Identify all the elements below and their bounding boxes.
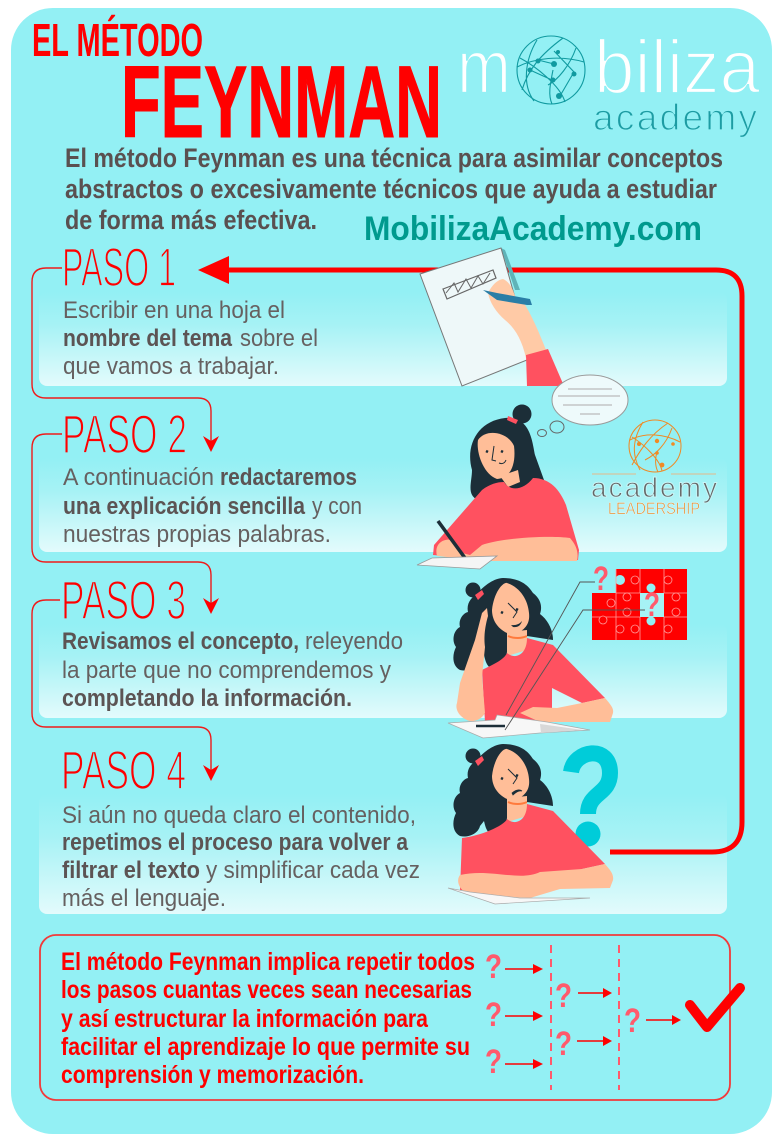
logo: academy leadership: LEADERSHIP bbox=[608, 499, 700, 518]
icon: puzzle: ? bbox=[644, 586, 660, 624]
step 2 text: nuestras propias palabras. bbox=[63, 521, 331, 548]
icon: puzzle: ? bbox=[593, 560, 609, 598]
step 3 text bbox=[62, 628, 403, 712]
step 1 text bbox=[63, 297, 318, 380]
logo: mobiliza academy bbox=[457, 25, 761, 138]
step 4 bbox=[61, 739, 420, 912]
intro text: de forma más efectiva. bbox=[65, 205, 317, 235]
panel: paso 4 background bbox=[39, 794, 727, 914]
logo: mobiliza academy: biliza bbox=[594, 25, 761, 110]
step 3 text: Revisamos el concepto, bbox=[62, 628, 299, 655]
step 2 bbox=[62, 403, 362, 548]
illustration: woman thinking bbox=[448, 578, 613, 738]
intro text bbox=[65, 143, 723, 235]
step 3 text: la parte que no comprendemos y bbox=[62, 657, 391, 684]
filter diagram: ? bbox=[485, 948, 502, 986]
step 2 heading: PASO 2 bbox=[62, 403, 187, 465]
step 1 text: sobre el bbox=[240, 325, 318, 352]
step 4 text: Si aún no queda claro el contenido, bbox=[62, 802, 416, 829]
illustration: woman writing bbox=[417, 404, 579, 569]
step 1 heading: PASO 1 bbox=[62, 236, 176, 298]
step 2 text: redactaremos bbox=[220, 464, 357, 491]
logo: academy leadership: academy bbox=[591, 472, 717, 503]
step 1 text: nombre del tema bbox=[63, 325, 233, 352]
connector: paso 2 to 3 bbox=[32, 434, 219, 614]
icon: large question mark bbox=[571, 753, 610, 846]
step 1 text: que vamos a trabajar. bbox=[63, 353, 279, 380]
step 3 heading: PASO 3 bbox=[61, 569, 186, 631]
step 2 text: y con bbox=[312, 493, 362, 520]
icon: paper and writing hand bbox=[420, 248, 564, 386]
callout: summary bbox=[40, 935, 740, 1100]
step 2 text: A continuación bbox=[63, 464, 214, 491]
step 3 bbox=[61, 569, 403, 712]
loop arrow bbox=[198, 256, 742, 852]
filter diagram: ? bbox=[485, 996, 502, 1034]
panel: paso 1 background bbox=[39, 292, 727, 386]
icon: check mark bbox=[690, 988, 740, 1027]
filter diagram: ? bbox=[555, 1025, 572, 1063]
icon: thought bubble bbox=[538, 375, 628, 436]
panel: paso 3 background bbox=[39, 624, 727, 718]
step 1 text: Escribir en una hoja el bbox=[63, 297, 285, 324]
logo: academy leadership bbox=[591, 420, 717, 518]
connector: paso 1 to 2 bbox=[32, 268, 219, 452]
filter diagram: ? bbox=[485, 1043, 502, 1081]
leader lines bbox=[505, 582, 645, 730]
step 3 text: completando la información. bbox=[62, 685, 352, 712]
step 3 text: releyendo bbox=[305, 628, 403, 655]
filter diagram: ? bbox=[555, 977, 572, 1015]
step 4 heading: PASO 4 bbox=[61, 739, 186, 801]
title: EL MÉTODO bbox=[32, 14, 203, 66]
logo: mobiliza academy: academy bbox=[593, 97, 758, 138]
step 4 text: repetimos el proceso para volver a bbox=[62, 829, 409, 856]
filter diagram: ? bbox=[624, 1002, 641, 1040]
connector: paso 3 to 4 bbox=[32, 600, 219, 781]
step 4 text: más el lenguaje. bbox=[62, 885, 226, 912]
step 4 text: filtrar el texto bbox=[62, 857, 200, 884]
callout text: El método Feynman implica repetir todos bbox=[61, 948, 475, 976]
title bbox=[32, 14, 442, 159]
callout text: los pasos cuantas veces sean necesarias bbox=[61, 976, 472, 1004]
icon: puzzle bbox=[592, 560, 687, 640]
logo: mobiliza academy: m bbox=[457, 25, 511, 110]
step 2 text: una explicación sencilla bbox=[63, 493, 306, 520]
step 4 text bbox=[62, 802, 420, 912]
callout text: comprensión y memorización. bbox=[61, 1061, 364, 1089]
website url: MobilizaAcademy.com bbox=[364, 210, 702, 248]
callout text bbox=[61, 948, 475, 1089]
filter diagram bbox=[485, 945, 740, 1090]
illustration: woman confused bbox=[448, 744, 613, 904]
step 1 bbox=[62, 236, 318, 380]
callout text: facilitar el aprendizaje lo que permite su bbox=[61, 1033, 470, 1061]
panel: paso 2 background bbox=[39, 458, 727, 552]
callout text: y así estructurar la información para bbox=[61, 1005, 429, 1033]
title: FEYNMAN bbox=[121, 45, 442, 159]
step 2 text bbox=[63, 464, 362, 548]
step 4 text: y simplificar cada vez bbox=[206, 857, 420, 884]
